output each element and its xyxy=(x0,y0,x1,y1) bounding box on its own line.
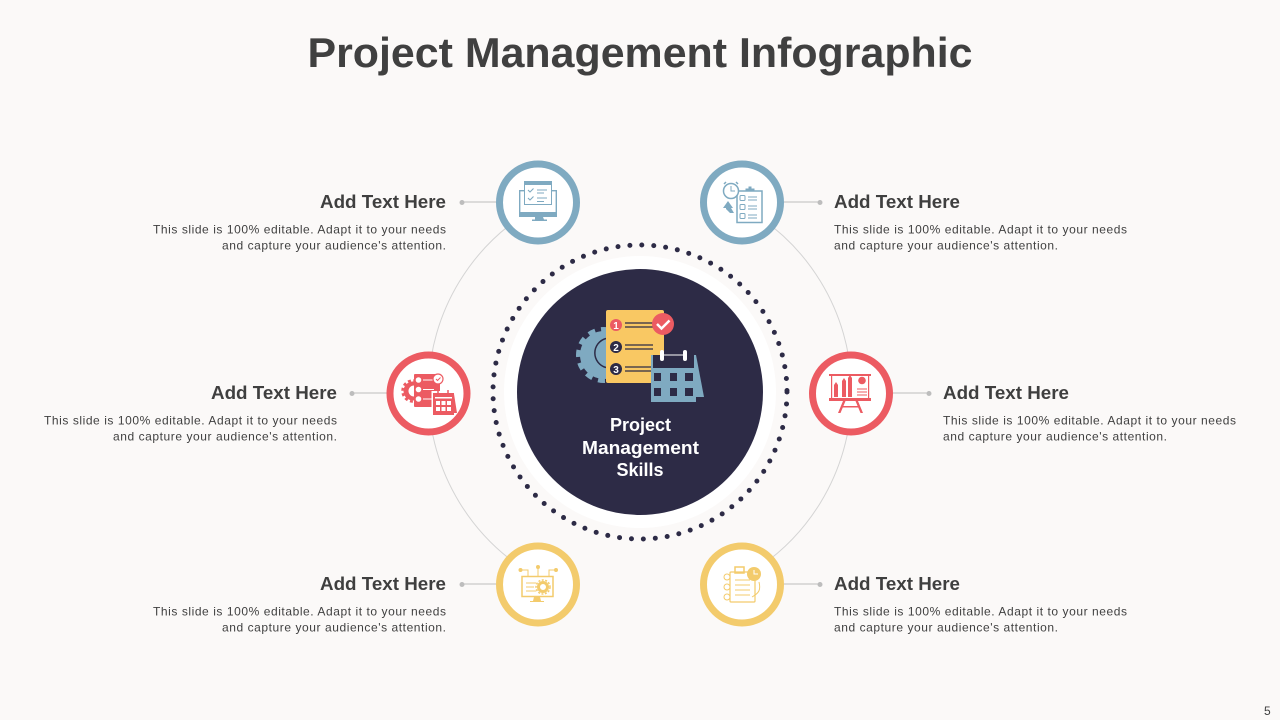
node: bottom left xyxy=(153,546,576,634)
description: This slide is 100% editable. Adapt it to your needs xyxy=(153,222,446,236)
icon: project checklist and calendar: 2 xyxy=(613,343,619,354)
node: bottom right xyxy=(704,546,1127,634)
icon: clipboard with timer xyxy=(724,567,761,602)
description: This slide is 100% editable. Adapt it to your needs xyxy=(44,414,337,428)
description xyxy=(943,414,1236,444)
heading: Add Text Here xyxy=(943,383,1069,403)
icon: project checklist and calendar xyxy=(578,310,704,402)
icon: clock and clipboard xyxy=(723,182,762,222)
description: This slide is 100% editable. Adapt it to your needs xyxy=(834,222,1127,236)
description: and capture your audience's attention. xyxy=(943,430,1167,444)
description xyxy=(834,604,1127,634)
page number: 5 xyxy=(1264,704,1271,718)
heading: Add Text Here xyxy=(211,383,337,403)
icon: project checklist and calendar: 1 xyxy=(613,321,619,332)
description: This slide is 100% editable. Adapt it to your needs xyxy=(943,414,1236,428)
description: and capture your audience's attention. xyxy=(222,620,446,634)
node: middle right xyxy=(812,355,1236,444)
hub label: Management xyxy=(582,438,699,458)
node: top right xyxy=(704,164,1127,252)
icon: checklist and calendar xyxy=(402,374,457,416)
heading: Add Text Here xyxy=(320,192,446,212)
central hub xyxy=(493,245,787,539)
icon: project checklist and calendar: 3 xyxy=(613,365,619,376)
description: and capture your audience's attention. xyxy=(834,620,1058,634)
description xyxy=(153,222,446,252)
description: and capture your audience's attention. xyxy=(834,238,1058,252)
node: top left xyxy=(153,164,576,252)
hub label xyxy=(582,415,699,480)
icon: monitor with gear xyxy=(519,566,558,602)
title: Project Management Infographic xyxy=(308,29,972,76)
heading: Add Text Here xyxy=(320,574,446,594)
description: and capture your audience's attention. xyxy=(222,238,446,252)
heading: Add Text Here xyxy=(834,192,960,212)
icon: presentation board xyxy=(829,374,871,413)
description: and capture your audience's attention. xyxy=(113,430,337,444)
icon: monitor checklist xyxy=(519,181,557,221)
description xyxy=(44,414,337,444)
description xyxy=(834,222,1127,252)
hub label: Project xyxy=(610,415,671,435)
hub label: Skills xyxy=(616,460,664,480)
node: middle left xyxy=(44,355,467,444)
description: This slide is 100% editable. Adapt it to your needs xyxy=(834,604,1127,618)
description xyxy=(153,604,446,634)
heading: Add Text Here xyxy=(834,574,960,594)
description: This slide is 100% editable. Adapt it to your needs xyxy=(153,604,446,618)
